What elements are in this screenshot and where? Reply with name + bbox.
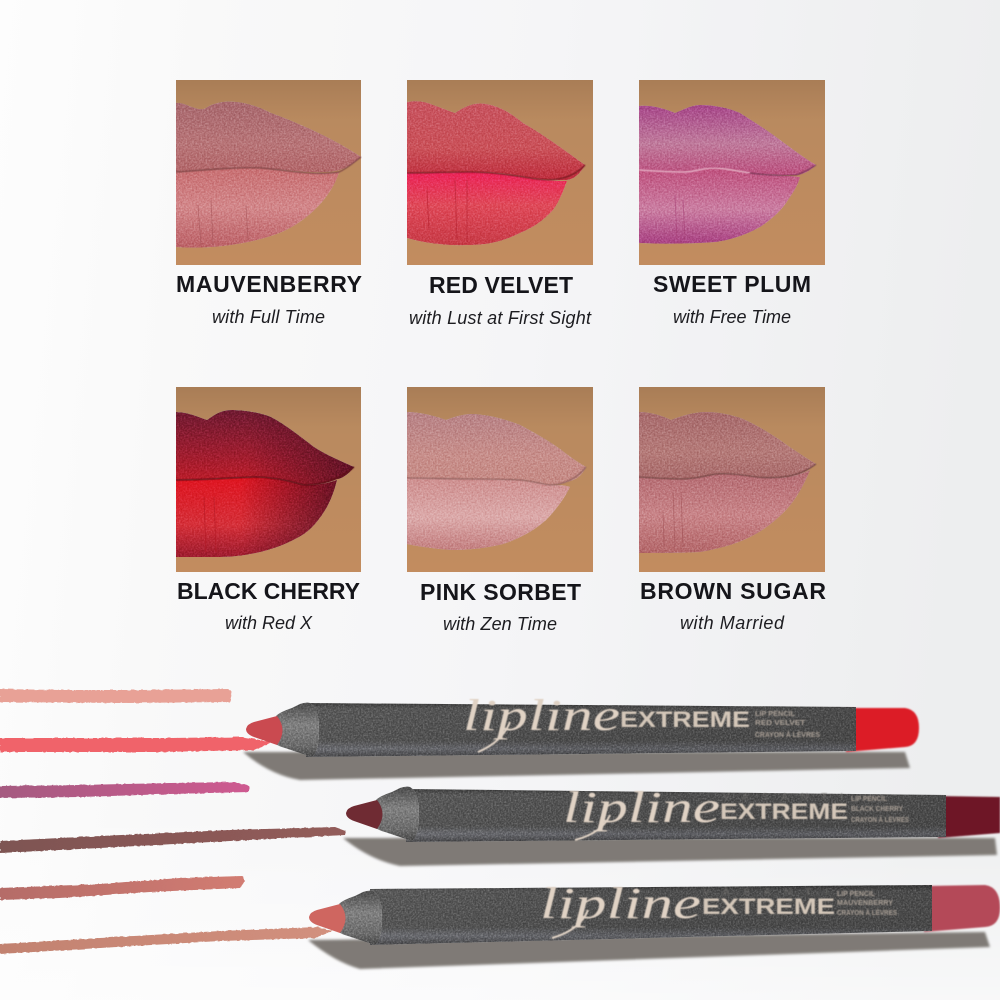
ferrule and tip	[246, 703, 319, 757]
barrel	[406, 789, 946, 842]
shade name: SWEET PLUM	[653, 271, 811, 297]
panel: Black Cherry shade	[176, 387, 361, 633]
cap	[938, 796, 1000, 838]
panel: Mauvenberry shade	[176, 80, 362, 327]
swatch 2	[0, 737, 272, 752]
logo	[463, 691, 820, 752]
shade name: PINK SORBET	[420, 579, 581, 605]
swatch 6	[0, 927, 332, 954]
shade name: BLACK CHERRY	[177, 578, 360, 604]
script word: lipline	[540, 879, 701, 928]
panel: Pink Sorbet shade	[407, 387, 593, 634]
small print: LIP PENCIL	[837, 889, 875, 898]
photo: Brown Sugar lips	[639, 387, 825, 572]
cap	[846, 708, 919, 752]
small print: MAUVENBERRY	[837, 898, 893, 907]
script word: lipline	[563, 783, 720, 832]
ferrule and tip	[346, 787, 419, 841]
barrel	[370, 885, 932, 945]
panel: Red Velvet shade	[407, 80, 593, 328]
photo: Pink Sorbet lips	[407, 387, 593, 572]
shadow	[243, 752, 910, 780]
cap	[924, 885, 1000, 932]
brand name: VASANTI	[703, 887, 828, 898]
small print: CRAYON À LÈVRES	[837, 908, 897, 917]
pencil 3: Mauvenberry	[308, 879, 1000, 969]
small print: CRAYON À LÈVRES	[851, 815, 909, 824]
small print: BLACK CHERRY	[851, 804, 903, 813]
pencil 1: Red Velvet	[243, 691, 919, 780]
photo: Mauvenberry lips	[176, 80, 361, 265]
shadow	[343, 838, 997, 866]
swatch 4	[0, 827, 346, 853]
product name: EXTREME	[702, 894, 835, 919]
pairing note: with Lust at First Sight	[409, 308, 592, 328]
small print: CRAYON À LÈVRES	[755, 730, 820, 739]
swatch 1	[0, 689, 232, 703]
script word: lipline	[463, 691, 620, 740]
shade name: MAUVENBERRY	[176, 271, 362, 297]
flourish	[478, 722, 510, 752]
photo: Red Velvet lips	[407, 80, 593, 265]
product name: EXTREME	[620, 707, 750, 732]
swatch 3	[0, 782, 249, 798]
pencil 2: Black Cherry	[343, 783, 1000, 866]
photo: Black Cherry lips	[176, 387, 361, 572]
pairing note: with Married	[680, 613, 785, 633]
panel: Brown Sugar shade	[639, 387, 826, 633]
pairing note: with Zen Time	[443, 614, 557, 634]
swatch 5	[0, 876, 245, 900]
flourish	[552, 910, 588, 938]
swatches: liner strokes	[0, 689, 346, 954]
logo	[540, 879, 897, 938]
shadow	[308, 932, 990, 969]
pairing note: with Red X	[225, 613, 313, 633]
small print: LIP PENCIL	[755, 709, 795, 718]
flourish	[575, 815, 610, 840]
shade name: RED VELVET	[429, 272, 573, 298]
product name: EXTREME	[720, 799, 848, 824]
small print: RED VELVET	[755, 718, 805, 727]
pairing note: with Full Time	[212, 307, 325, 327]
ferrule and tip	[309, 891, 382, 945]
logo	[563, 783, 909, 840]
pairing note: with Free Time	[673, 307, 791, 327]
panel: Sweet Plum shade	[639, 80, 825, 327]
photo: Sweet Plum lips	[639, 80, 825, 265]
shade name: BROWN SUGAR	[640, 578, 826, 604]
barrel	[306, 703, 856, 757]
brand name: VASANTI	[723, 792, 843, 803]
small print: LIP PENCIL	[851, 794, 887, 803]
